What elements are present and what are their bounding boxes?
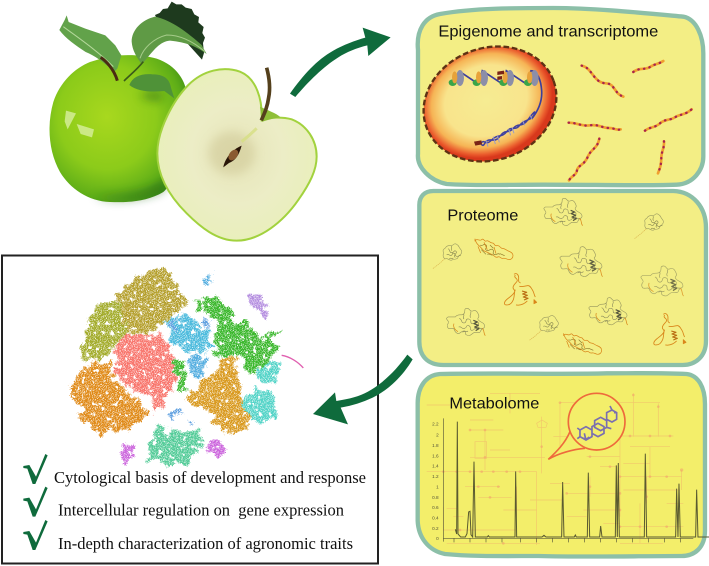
y axis labels: 0.6 bbox=[432, 505, 439, 510]
methyl mark bbox=[474, 140, 482, 146]
list item 3: In-depth characterization of agronomic traits bbox=[58, 534, 353, 553]
icon: whole green apple bbox=[50, 55, 187, 202]
callout: molecule bbox=[548, 393, 625, 459]
box outline bbox=[2, 256, 378, 564]
DNA helix bbox=[481, 112, 535, 145]
icon: cut apple half bbox=[157, 69, 317, 241]
icon: small bottom leaf bbox=[129, 74, 174, 98]
arrow: apple to omics panels bbox=[290, 28, 391, 97]
panel background bbox=[418, 8, 703, 185]
icon: dark leaf bbox=[155, 2, 205, 60]
y axis labels: 1.2 bbox=[432, 474, 439, 479]
y axis labels: 1 bbox=[436, 484, 439, 489]
DNA rungs bbox=[486, 115, 532, 147]
check 1 bbox=[23, 454, 48, 484]
check 2 bbox=[23, 487, 48, 517]
nucleus bbox=[407, 28, 573, 180]
panel: epigenome and transcriptome bbox=[407, 8, 703, 185]
apple illustration bbox=[50, 2, 317, 241]
cut apple stem bbox=[261, 68, 270, 120]
scatter pink streak bbox=[282, 355, 303, 368]
callout tail bbox=[548, 432, 585, 459]
DNA strand bbox=[460, 71, 542, 119]
icon: large leaf bbox=[132, 17, 207, 64]
y axis labels: 1.8 bbox=[432, 443, 439, 448]
seed highlight bbox=[226, 148, 240, 162]
stems bbox=[101, 57, 117, 81]
y axis labels: 0.8 bbox=[432, 495, 439, 500]
protein structures bbox=[433, 198, 686, 354]
y axis labels: 0 bbox=[436, 536, 439, 541]
panel background bbox=[418, 373, 705, 557]
list item 2: Intercellular regulation on gene expression bbox=[58, 500, 344, 520]
icon: apple seed bbox=[223, 146, 242, 167]
nucleus body bbox=[407, 28, 573, 180]
metabolic pathway background bbox=[427, 393, 683, 545]
left leaf vein bbox=[63, 27, 113, 67]
mRNA strands bbox=[569, 61, 692, 180]
apple highlights bbox=[65, 111, 94, 137]
panel: proteome bbox=[419, 191, 706, 365]
callout bubble bbox=[568, 393, 625, 450]
apple core shade bbox=[208, 132, 255, 175]
y axis labels: 1.6 bbox=[432, 453, 439, 458]
panel: single-cell result box bbox=[2, 256, 378, 564]
y axis labels bbox=[432, 422, 439, 541]
heading: Metabolome bbox=[449, 395, 540, 412]
list item 1: Cytological basis of development and response bbox=[54, 468, 366, 487]
cut apple skin at top bbox=[260, 107, 281, 122]
heading: Epigenome and transcriptome bbox=[438, 24, 659, 41]
y axis labels: 2.2 bbox=[432, 422, 439, 427]
large leaf vein bbox=[140, 35, 205, 58]
scatter plot clusters bbox=[68, 267, 283, 465]
apple shading bbox=[93, 92, 167, 200]
check 3 bbox=[23, 520, 48, 550]
y axis labels: 2 bbox=[436, 433, 439, 438]
arrow: omics panels to scatter bbox=[313, 355, 413, 424]
pathway nodes bbox=[442, 394, 683, 545]
icon: left leaf bbox=[59, 15, 121, 72]
panel background bbox=[419, 191, 706, 365]
nucleosomes bbox=[449, 70, 539, 86]
y axis labels: 0.2 bbox=[432, 526, 439, 531]
chromatogram bbox=[432, 418, 709, 542]
peaks bbox=[455, 422, 709, 537]
axes bbox=[443, 418, 693, 542]
heading: Proteome bbox=[447, 208, 519, 225]
molecule structure bbox=[577, 406, 617, 440]
y axis labels: 0.4 bbox=[432, 516, 439, 521]
y axis labels: 1.4 bbox=[432, 464, 439, 469]
core line bbox=[242, 128, 257, 142]
panel: metabolome bbox=[418, 373, 709, 557]
